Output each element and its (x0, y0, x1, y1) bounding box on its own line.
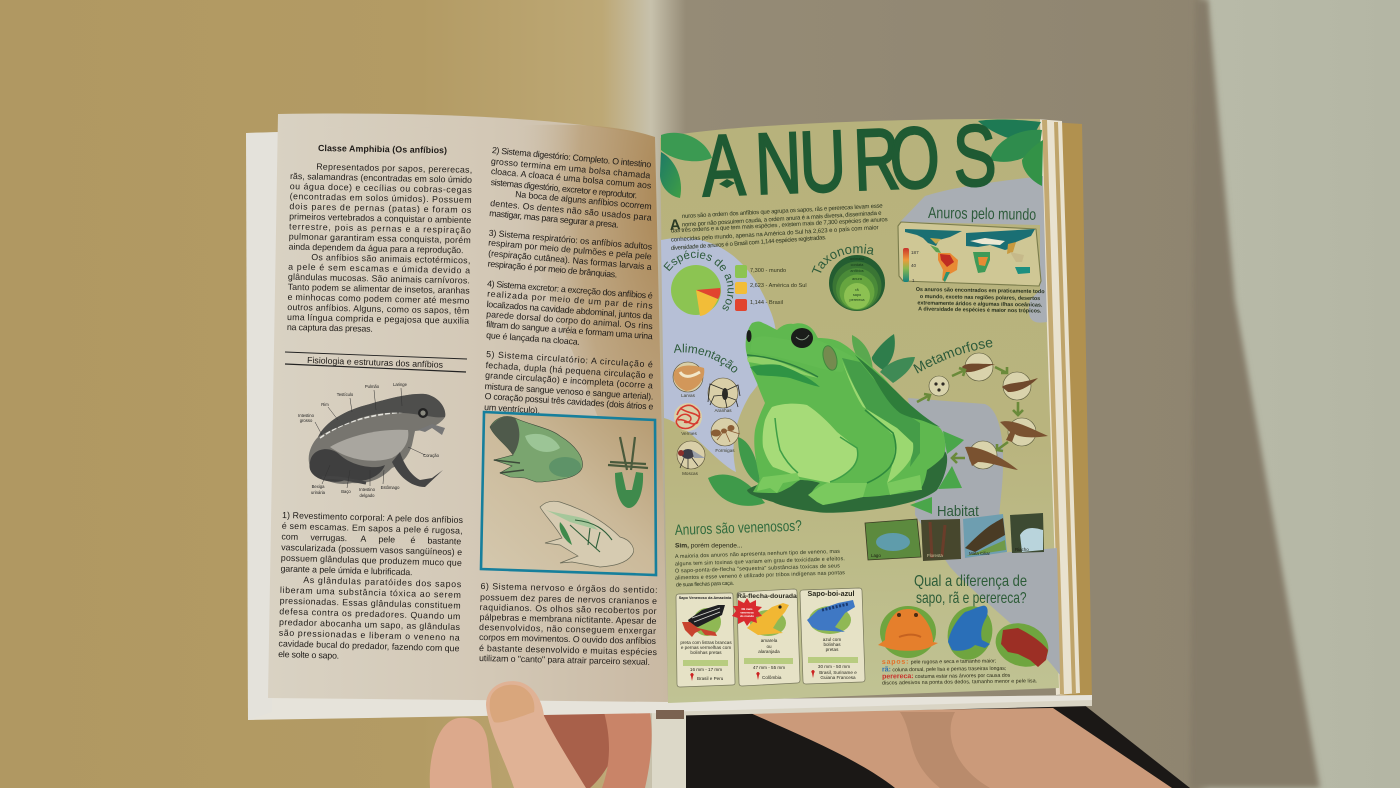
text block: sistema respiratório (487, 228, 653, 280)
text block: revestimento corporal: garante a pele úmida e lubrificada. (280, 563, 413, 577)
card: Sapo Venenoso da Amazônia: e pernas vermelhas com (681, 645, 731, 650)
text block: sistema excretor: parede dorsal do corpo do animal. Os rins (486, 309, 654, 331)
anatomy label leader lines (315, 388, 425, 488)
text block: revestimento corporal: 1) Revestimento corporal: A pele dos anfíbios (282, 510, 464, 525)
map (905, 229, 1035, 282)
text block: venenosos: A maioria dos anuros não apresenta nenhum tipo de veneno, mas (675, 549, 840, 560)
feet (757, 473, 922, 505)
text block: revestimento corporal: verrugas. (310, 532, 347, 543)
text block: sistema excretor (486, 279, 654, 347)
left page (268, 113, 668, 702)
text block: sistema circulatório: 5) Sistema circulatório: A circulação é (486, 349, 653, 369)
text block: venenosos: alguns tem sim toxinas que variam em grau de toxicidade e efeitos. (675, 556, 845, 567)
card: Rã-flecha-dourada (732, 589, 800, 686)
nostril (746, 330, 752, 342)
card: Rã-flecha-dourada: alaranjada (758, 649, 780, 654)
card: Sapo-boi-azul: bolinhas (823, 642, 841, 647)
card: Sapo Venenoso da Amazônia (676, 593, 735, 687)
frog illustration: green (490, 416, 583, 482)
map legend (903, 248, 919, 283)
diagram: frog heart (608, 437, 648, 508)
text block: frog differences (882, 657, 1037, 686)
card: Rã-flecha-dourada: Rã-flecha-dourada (737, 593, 797, 600)
card: Sapo-boi-azul: Guiana Francesa (820, 675, 856, 680)
taxonomy nested circles (829, 255, 885, 311)
habitat: floresta (921, 519, 961, 561)
title letter A diamond (719, 179, 735, 188)
map caption: A diversidade de espécies é maior nos trópicos. (918, 306, 1042, 315)
intro text (669, 203, 888, 252)
text block: intro: Tanto podem se alimentar de insetos, aranhas (288, 282, 470, 296)
text block: venenosos: alimentos e esse veneno é utilizado por tribos indígenas nas pontas (675, 570, 845, 581)
text block: sistema digestório: 2) Sistema digestório: Completo. O intestino (492, 145, 652, 170)
anatomy labels: Rim (321, 402, 329, 407)
heading: Qual a diferença: sapo, rã e perereca? (916, 588, 1027, 606)
text block: sistema digestório: Na boca de alguns anfíbios ocorrem (515, 189, 652, 211)
text block: sistema respiratório: (respiração cutânea). Nas formas larvais a (488, 248, 652, 272)
anatomy labels: Laringe (393, 382, 408, 387)
text block: sistema circulatório (484, 349, 654, 416)
text block: revestimento corporal: liberam uma substância tóxica ao serem (280, 585, 461, 600)
frog: red (989, 616, 1055, 674)
card: Sapo Venenoso da Amazônia: 16 mm - 17 mm (690, 667, 722, 672)
habitat: mata ciliar (963, 514, 1007, 558)
icon: formigas: Formigas (715, 448, 735, 453)
icon: aranhas: Aranhas (714, 408, 732, 413)
map legend: 40 (911, 263, 917, 268)
callout: red starburst: venenosa (740, 610, 754, 614)
middle column text top (479, 145, 658, 667)
taxonomy nested circles: anfíbios (850, 269, 864, 273)
text block: revestimento corporal: possuem glândulas que produzem muco que (281, 553, 462, 568)
text block: sistema circulatório: um ventrículo). (484, 402, 540, 416)
left column text (278, 143, 473, 664)
text block: sistema circulatório: O coração possui três cavidades (dois átrios e (484, 391, 654, 412)
text block: frog differences: rã: coluna dorsal, pele lisa e pernas traseiras longas; (882, 665, 1006, 673)
card: Sapo-boi-azul: Brasil, Suriname e (819, 670, 857, 675)
text block: intro: ou água doce) e cecílias ou cobras-cegas (290, 181, 473, 195)
text block: revestimento corporal: bastante (427, 535, 461, 546)
icon: top-left leaves (660, 133, 712, 198)
anatomy illustration of frog (298, 382, 445, 498)
text block: sistema nervoso: corpos em movimentos. O ouvido dos anfíbios (479, 632, 657, 646)
icon: vermes: Vermes (681, 431, 697, 436)
text block: sistema nervoso: possuem dez pares de nervos cranianos e (480, 592, 657, 606)
text block: sistema digestório: grosso termina em uma bolsa chamada (491, 156, 651, 181)
text block: intro: outros anfíbios. Alguns, como os sapos, têm (287, 302, 469, 316)
intro text: nuros são a ordem dos anfíbios que agrupa os sapos, rãs e pererecas levam esse (682, 203, 883, 220)
taxonomy nested circles: sapo (853, 293, 861, 297)
right hand (748, 708, 1172, 788)
heading: Metamorfose: Metamorfose (913, 340, 992, 374)
card: Sapo-boi-azul (800, 588, 865, 684)
text block: revestimento corporal: cavidade bucal do predador, fazendo com que (278, 638, 460, 653)
frog: large illustration (708, 322, 964, 514)
text block: venenosos: de suas flechas para caça. (676, 581, 734, 588)
book back cover (1050, 122, 1092, 705)
page background (660, 119, 1059, 703)
habitat: riacho (1010, 513, 1044, 553)
map caption: extremamente áridos e algumas ilhas oceânicas. (917, 300, 1043, 309)
text block: sistema digestório: mastigar, mas para segurar a presa. (489, 208, 619, 230)
habitat: floresta: Floresta (927, 553, 943, 558)
text block: revestimento corporal: é (410, 535, 416, 545)
card: Sapo-boi-azul: azul com (823, 637, 841, 642)
text block: intro: primeiros vertebrados a conquistar o ambiente (289, 211, 471, 225)
habitat: lago: Lago (871, 553, 881, 558)
thumb (486, 681, 586, 788)
text block: sistema excretor: filtram do sangue a uréia e formam uma urina (486, 319, 653, 341)
text block: sistema circulatório: mistura de sangue venoso e sangue arterial). (484, 381, 654, 402)
text block: intro: Os anfíbios são animais ectotérmicos, (311, 252, 470, 265)
text block: sistema nervoso: utilizam o "canto" para atrair parceiro sexual. (479, 653, 650, 667)
text block: frog differences: discos adesivos na ponta dos dedos, tamanho menor e pele lisa. (882, 678, 1037, 686)
text block: sistema digestório: sistemas digestório, excretor e reprodutor. (490, 177, 638, 200)
world map card (898, 222, 1041, 286)
card: Sapo Venenoso da Amazônia: Brasil e Peru (697, 676, 724, 681)
habitat: riacho: Riacho (1015, 547, 1029, 552)
pie legend (735, 265, 807, 311)
heading: Fisiologia (285, 352, 467, 372)
fingers behind book (430, 712, 652, 788)
text block: revestimento corporal: defesa contra os predadores. Quando um (279, 606, 460, 621)
text block: intro: terrestre, pois as pernas e a respiração (289, 221, 471, 235)
body (746, 322, 945, 505)
text block: revestimento corporal: pele (378, 534, 395, 545)
intro text: diversidade de anuros é o Brasil com 1,144 espécies registradas. (671, 235, 827, 252)
text block: sistema nervoso: 6) Sistema nervoso e órgãos do sentido: (480, 581, 658, 595)
taxonomy nested circles: anura (852, 277, 863, 281)
icon: larvas: Larvas (681, 393, 696, 398)
lily pad (747, 451, 947, 513)
frog: orange toad (878, 606, 938, 658)
card: Rã-flecha-dourada: Colômbia (762, 675, 782, 680)
card: Rã-flecha-dourada: 47 mm - 55 mm (753, 665, 785, 670)
text block: sistema nervoso: raquidianos. Os olhos são recobertos por (479, 602, 657, 616)
callout: red starburst: Rã mais (741, 607, 753, 611)
text block: sistema respiratório: respiram por meio de pulmões e pela pele (488, 238, 652, 262)
heading: Anuros são venenosos: Anuros são venenosos? (675, 517, 802, 538)
title: ANUROS (700, 107, 998, 215)
book (246, 107, 1092, 720)
anatomy labels: urinária (311, 490, 326, 495)
text block: intro: (encontradas em solos úmidos). Possuem (290, 191, 472, 205)
taxonomy nested circles: animalia (850, 257, 865, 261)
text block: intro: ainda dependem da água para a reprodução. (288, 241, 464, 255)
intro text: A (669, 216, 681, 234)
pie legend: 2,623 - América do Sul (750, 283, 807, 289)
taxonomy nested circles: rã (855, 288, 860, 292)
text block: intro: rãs, salamandras (encontradas em solo úmido (290, 171, 472, 185)
right page stack (1036, 119, 1080, 695)
intro text: conhecidas pelo mundo, apenas na América do Sul há 2,623 e o país com maior (671, 225, 879, 243)
intro text: nome por não possuirem cauda, a ordem anura é a mais diversa, disseminada e (682, 211, 882, 228)
anatomy labels: Pulmão (365, 384, 380, 389)
frog: blue (942, 601, 998, 665)
dark sleeve (685, 704, 1190, 788)
text block: sistema respiratório: 3) Sistema respiratório: os anfíbios adultos (488, 228, 653, 252)
map caption: o mundo, exceto nas regiões polares, desertos (920, 294, 1040, 302)
food icons (673, 362, 740, 476)
pie chart (671, 265, 721, 316)
text block: frog differences: perereca: costuma estar nas árvores por causa dos (882, 672, 1011, 680)
anatomy labels: delgado (360, 493, 375, 498)
anatomy labels: grosso (300, 418, 313, 423)
white page block (247, 132, 1092, 720)
map legend: 187 (911, 250, 919, 255)
text block: sistema nervoso: desenvolvidos, não conseguem enxergar (479, 622, 656, 636)
text block: intro: pulmonar garantiram essa conquista, porém (289, 231, 471, 245)
metamorphosis cycle (917, 353, 1048, 470)
text block: intro: na captura das presas. (287, 322, 373, 334)
callout: red starburst (732, 598, 762, 626)
right page: Anuros infographic (660, 107, 1060, 703)
text block: frog differences: sapos: pele rugosa e seca e tamanho maior; (882, 657, 996, 666)
taxonomy nested circles: cordata (851, 263, 864, 267)
text block: revestimento corporal: A (360, 534, 367, 544)
habitat: mata ciliar: Mata Ciliar (969, 551, 991, 556)
pie legend: 1,144 - Brasil (750, 300, 783, 306)
head highlight (750, 336, 855, 372)
text block: intro: e minhocas como podem comer até mesmo (287, 292, 470, 306)
anatomy labels: Baço (341, 489, 351, 494)
thigh and belly lines (865, 410, 896, 483)
text block: sistema excretor: realizada por meio de um par de rins (487, 289, 654, 311)
heading: Classe Amphibia: Classe Amphibia (Os anfíbios) (318, 143, 447, 155)
text block: revestimento corporal: ele solte o sapo. (278, 649, 339, 661)
text block: sistema digestório: cloaca. A cloaca é uma bolsa comum aos (491, 166, 652, 191)
map caption: Os anuros são encontrados em praticamente todo (916, 287, 1045, 295)
mouth line and jaw band (747, 355, 820, 387)
anatomy labels: Estômago (381, 485, 400, 490)
tympanum (820, 344, 840, 372)
text block: sistema circulatório: fechada, dupla (há pequena circulação e (485, 360, 654, 381)
habitat images (865, 513, 1044, 561)
mid flank shading (842, 358, 920, 467)
text block: venenosos: O sapo-ponta-de-flecha "sequestra" substâncias toxicas de seus (675, 563, 840, 574)
text block: revestimento corporal: é sem escamas. Em sapos a pele é rugosa, (282, 521, 463, 536)
callout: red starburst: do mundo (740, 614, 754, 618)
anatomy labels: Bexiga (312, 484, 325, 489)
frog illustration: outline with organs (540, 501, 634, 567)
text block: sistema nervoso: é bastante desenvolvido e muitas espécies (479, 643, 658, 657)
icon: top-right leaves (978, 119, 1043, 186)
arrows (917, 367, 1023, 463)
icon: moscas: Moscas (682, 471, 699, 476)
text block: revestimento corporal: vascularizada (possuem vasos sangüíneos) e (281, 542, 462, 557)
eye (791, 328, 813, 348)
text block: venenosos: Sim, porém depende... (675, 542, 743, 550)
heading: Qual a diferença: Qual a diferença de (914, 573, 1027, 590)
map caption (915, 287, 1045, 315)
heading: Habitat: Habitat (937, 502, 979, 519)
card: Sapo Venenoso da Amazônia: Sapo Venenoso da Amazônia (679, 596, 732, 600)
text block: revestimento corporal: predador abocanha um sapo, as glândulas (279, 617, 461, 632)
map legend: 1 (912, 278, 915, 283)
heading: Alimentação: Alimentação (674, 344, 738, 372)
white strip beneath book (652, 710, 686, 788)
text block: sistema digestório: dentes. Os dentes não são usados para (490, 198, 652, 223)
card: Sapo-boi-azul: pretas (826, 647, 839, 652)
text block: venenosos (675, 542, 845, 588)
text block: intro: Representados por sapos, pererecas, (316, 162, 472, 175)
anatomy labels: Intestino (359, 487, 376, 492)
text block: intro: glândulas mucosas. São animais carnívoros. (288, 272, 470, 285)
habitat: lago (865, 519, 921, 560)
anatomy labels (298, 382, 440, 498)
text block: revestimento corporal: são pressionadas e liberam o veneno na (279, 628, 460, 643)
text block: sistema circulatório: grande circulação) e incompleta (ocorre a (485, 370, 653, 391)
text block: sistema excretor: localizados na cavidade abdominal, juntos da (486, 299, 653, 321)
heading: Taxonomia: Taxonomia (812, 244, 874, 273)
text block: sistema digestório (489, 145, 652, 230)
heading: Qual a diferença (914, 573, 1027, 606)
taxonomy nested circles: perereca (850, 298, 865, 302)
text block: sistema respiratório: respiração é por meio de brânquias. (487, 259, 618, 280)
back stripe (855, 355, 940, 427)
leaves behind frog (708, 334, 964, 514)
text block: intro: a pele é sem escamas e úmida devido a (288, 262, 470, 275)
text block: revestimento corporal: com (281, 531, 298, 542)
heading: Espécies de anuros: Espécies de anuros (664, 250, 734, 311)
anatomy labels: Intestino (298, 413, 315, 418)
text block: intro: dois pares de pernas (patas) e foram os (289, 201, 472, 215)
light flank stripe (842, 360, 913, 483)
pie legend: 7,300 - mundo (750, 268, 786, 274)
anatomy labels: Coração (423, 453, 440, 458)
text block: sistema excretor: que é lançada na cloaca. (486, 330, 580, 347)
card: Sapo Venenoso da Amazônia: preta com listras brancas (680, 640, 732, 645)
text block: revestimento corporal: As glândulas paratóides dos sapos (303, 575, 462, 589)
card: Sapo Venenoso da Amazônia: bolinhas pretas (690, 650, 722, 655)
text block: revestimento corporal (278, 510, 464, 664)
card: Sapo-boi-azul: 30 mm - 50 mm (818, 664, 850, 669)
heading: Anuros pelo mundo: Anuros pelo mundo (928, 205, 1036, 224)
panel: teal framed frog illustrations (481, 412, 656, 575)
text block: intro: uma língua comprida e pegajosa que auxilia (287, 312, 469, 326)
card: Sapo-boi-azul: Sapo-boi-azul (807, 589, 855, 598)
card: Rã-flecha-dourada: ou (766, 644, 772, 649)
anatomy labels: Testículo (337, 392, 354, 397)
intro text: das três ordens e a que tem mais espécies , existem mais de 7,300 espécies de anuros (671, 217, 888, 234)
card: Rã-flecha-dourada: amarela (761, 638, 778, 643)
belly (763, 404, 858, 483)
text block: revestimento corporal: pressionadas. Essas glândulas constituem (280, 596, 461, 611)
text block: sistema excretor: 4) Sistema excretor: a excreção dos anfíbios é (487, 279, 653, 301)
text block: sistema nervoso (479, 581, 658, 667)
text block: sistema nervoso: pálpebras e membrana nictitante. Apesar de (479, 612, 657, 626)
heading: Fisiologia: Fisiologia e estruturas dos anfíbios (307, 355, 444, 370)
text block: intro (287, 161, 473, 336)
lilac background shapes (661, 176, 1060, 675)
